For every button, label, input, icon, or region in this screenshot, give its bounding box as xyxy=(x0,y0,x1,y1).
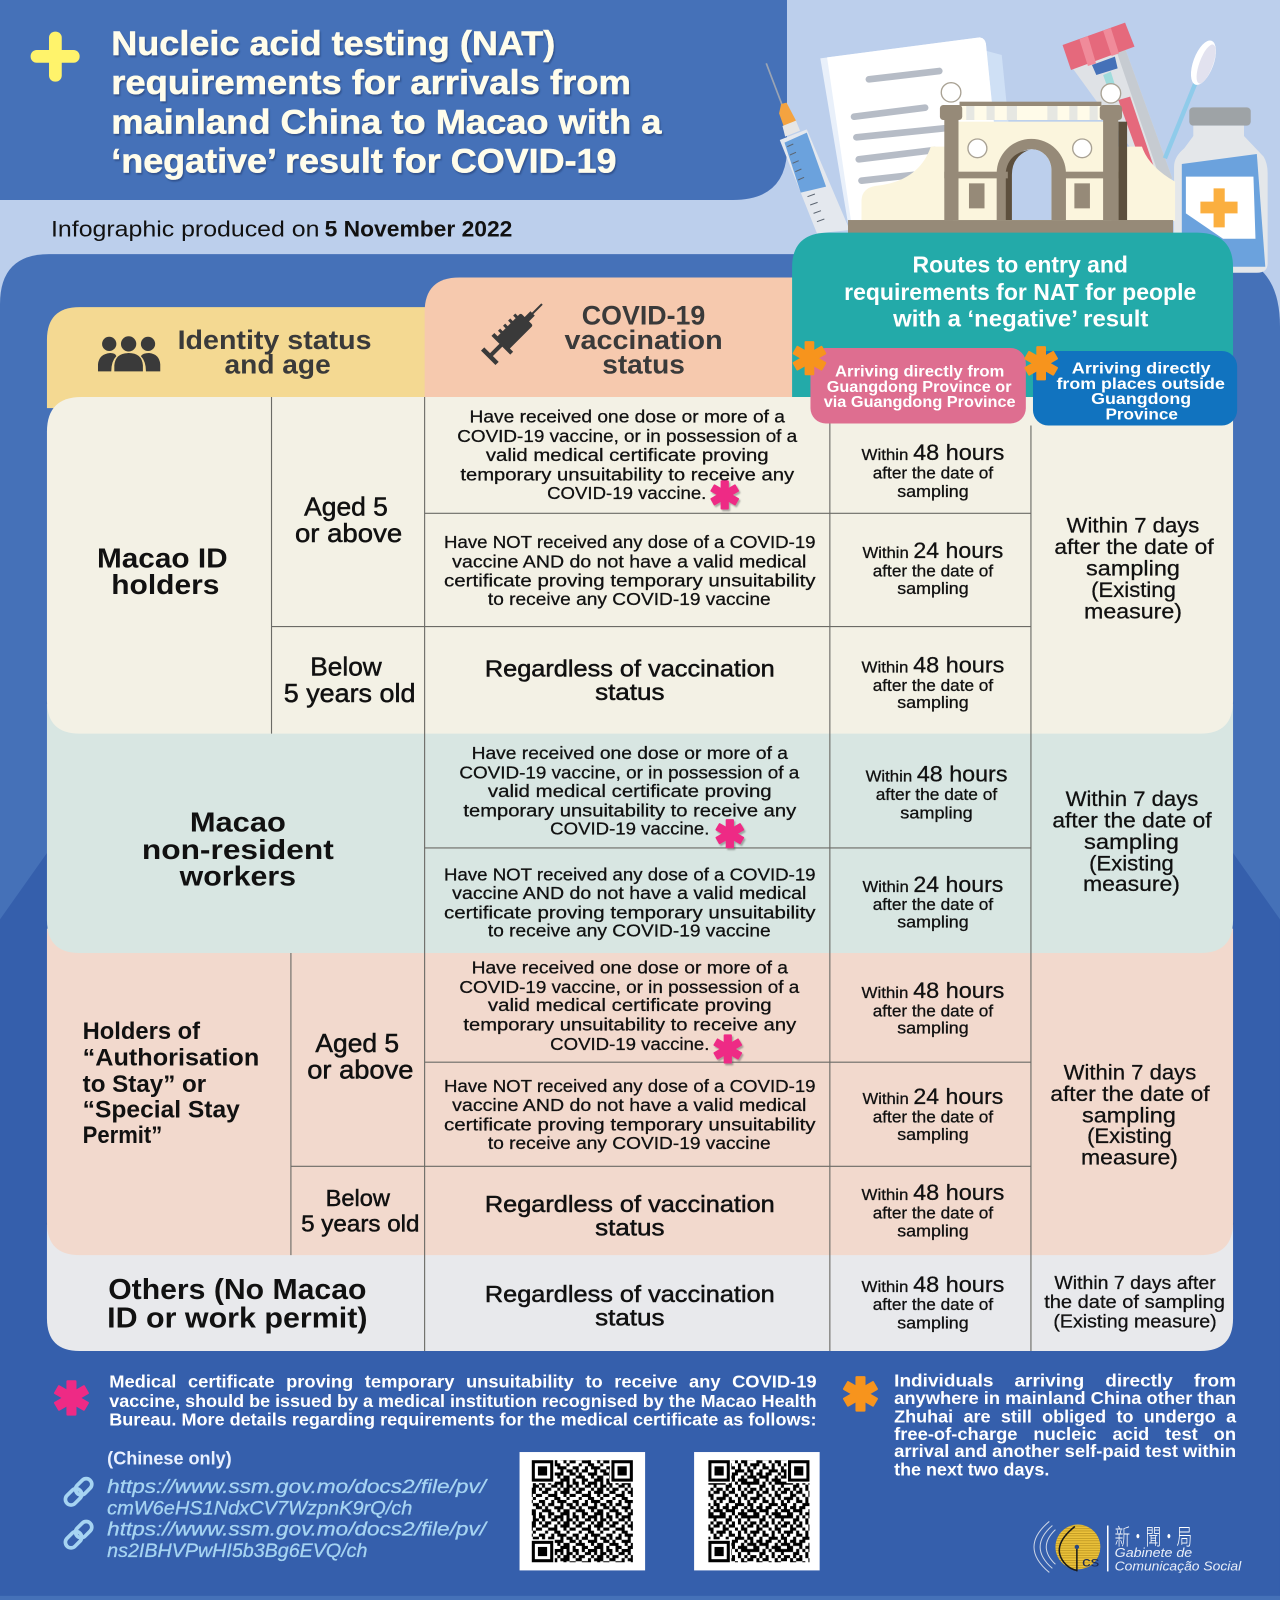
vaccination criteria xyxy=(459,957,799,1054)
title: requirements for arrivals from xyxy=(111,64,631,102)
footnote text: Medical certificate proving temporary unsuitability to receive any COVID-19 xyxy=(109,1372,817,1392)
identity label: non-resident xyxy=(142,834,334,865)
identity label: to Stay” or xyxy=(83,1071,207,1098)
footnote text: arrival and another self-paid test within xyxy=(894,1441,1236,1461)
time requirement: Within 24 hours xyxy=(863,872,1003,897)
logo: Gabinete de Comunicação Social: Gabinete de xyxy=(1115,1545,1192,1560)
footnote: arrivals from outside Zhuhai xyxy=(843,1371,1236,1480)
outside Guangdong requirement: (Existing xyxy=(1089,851,1174,875)
column header: arriving via Guangdong: Guangdong Province or xyxy=(827,379,1012,396)
title: Nucleic acid testing (NAT) xyxy=(111,25,555,63)
heading xyxy=(564,300,723,379)
time requirement: Within 48 hours xyxy=(861,440,1004,465)
heading: COVID-19 xyxy=(582,300,705,330)
vaccination criteria: Regardless of vaccination xyxy=(485,656,775,682)
links: ns2IBHVPwHI5b3Bg6EVQ/ch xyxy=(107,1540,367,1562)
age label: Below xyxy=(326,1185,390,1211)
vaccination criteria xyxy=(485,656,775,705)
vaccination criteria: temporary unsuitability to receive any xyxy=(463,1015,796,1035)
vaccination criteria: Have received one dose or more of a xyxy=(472,743,788,763)
icon: swab xyxy=(1165,37,1221,158)
vaccination criteria: status xyxy=(595,679,664,705)
outside Guangdong requirement: sampling xyxy=(1084,830,1179,854)
outside Guangdong requirement xyxy=(1044,1273,1225,1333)
vaccination criteria: COVID-19 vaccine, or in possession of a xyxy=(459,977,799,997)
vaccination criteria xyxy=(485,1191,775,1241)
links xyxy=(107,1476,489,1562)
time requirement xyxy=(861,978,1004,1038)
vaccination criteria: Have NOT received any dose of a COVID-19 xyxy=(444,532,816,552)
time requirement: Within 24 hours xyxy=(863,538,1003,563)
vaccination criteria: valid medical certificate proving xyxy=(488,995,772,1015)
time requirement xyxy=(863,538,1003,598)
icon: orange asterisk xyxy=(843,1376,878,1412)
icon: link xyxy=(63,1476,94,1507)
vaccination criteria: vaccine AND do not have a valid medical xyxy=(452,883,806,903)
vaccination criteria: to receive any COVID-19 vaccine xyxy=(488,921,771,941)
outside Guangdong requirement xyxy=(1054,514,1214,623)
vaccination criteria: valid medical certificate proving xyxy=(486,445,769,465)
age label xyxy=(284,654,415,708)
heading: requirements for NAT for people xyxy=(844,279,1196,305)
time requirement xyxy=(861,440,1004,501)
vaccination criteria: Have NOT received any dose of a COVID-19 xyxy=(444,1076,816,1096)
vaccination criteria: certificate proving temporary unsuitability xyxy=(444,902,816,922)
column header: arriving from outside Guangdong: Arriving directly xyxy=(1072,360,1211,377)
icon: test tube xyxy=(1063,23,1172,180)
vaccination criteria: Regardless of vaccination xyxy=(485,1191,775,1217)
heading xyxy=(178,325,372,379)
outside Guangdong requirement: Within 7 days xyxy=(1067,514,1199,538)
outside Guangdong requirement: measure) xyxy=(1084,599,1182,623)
time requirement: after the date of xyxy=(876,786,998,804)
icon: orange asterisk xyxy=(792,341,827,375)
title xyxy=(111,25,662,180)
age label: Aged 5 xyxy=(315,1030,399,1058)
vaccination criteria: COVID-19 vaccine. xyxy=(550,1034,709,1054)
time requirement: after the date of xyxy=(873,465,994,483)
row group: Macao ID holders xyxy=(97,406,1214,712)
icon: pink asterisk xyxy=(54,1380,89,1416)
identity label xyxy=(107,1274,367,1335)
age label: or above xyxy=(307,1057,413,1085)
production date: Infographic produced on xyxy=(51,217,319,242)
footnote: medical certificate xyxy=(54,1372,820,1570)
outside Guangdong requirement: Within 7 days xyxy=(1066,787,1198,811)
time requirement: after the date of xyxy=(873,563,994,581)
icon: yellow plus xyxy=(31,32,80,82)
time requirement: sampling xyxy=(897,483,969,501)
row: others background xyxy=(47,1224,1233,1351)
identity label: Macao xyxy=(190,807,286,838)
time requirement: Within 48 hours xyxy=(866,762,1007,787)
identity label: holders xyxy=(111,569,219,600)
outside Guangdong requirement: (Existing xyxy=(1091,578,1176,602)
vaccination criteria: status xyxy=(595,1215,664,1241)
age label: 5 years old xyxy=(301,1211,420,1237)
vaccination criteria: certificate proving temporary unsuitability xyxy=(444,571,816,591)
age label: or above xyxy=(295,520,402,548)
time requirement: after the date of xyxy=(873,1108,994,1126)
identity label: “Special Stay xyxy=(83,1096,240,1123)
time requirement: Within 24 hours xyxy=(863,1084,1003,1109)
footnote text: Zhuhai are still obliged to undergo a xyxy=(894,1406,1236,1426)
footnote text: free-of-charge nucleic acid test on xyxy=(894,1424,1236,1444)
time requirement: after the date of xyxy=(873,1002,994,1020)
vaccination criteria xyxy=(459,743,799,839)
vaccination criteria: COVID-19 vaccine, or in possession of a xyxy=(459,763,799,783)
time requirement xyxy=(861,1272,1004,1333)
icon: pink asterisk xyxy=(715,819,744,848)
footnote text: Bureau. More details regarding requirements for the medical certificate as follows: xyxy=(109,1410,817,1430)
QR code xyxy=(520,1452,645,1570)
outside Guangdong requirement: after the date of xyxy=(1050,1082,1210,1106)
illustration: medical items and Macao gate xyxy=(766,23,1268,273)
column header: arriving from outside Guangdong: Province xyxy=(1105,406,1178,423)
age label: Aged 5 xyxy=(304,493,388,521)
vaccination criteria: certificate proving temporary unsuitability xyxy=(444,1115,816,1135)
logo: Gabinete de Comunicação Social xyxy=(1034,1520,1242,1573)
time requirement: sampling xyxy=(900,804,973,822)
time requirement: sampling xyxy=(897,1223,969,1241)
identity label: Holders of xyxy=(83,1018,201,1045)
icon: pink asterisk xyxy=(710,480,739,509)
row group: others xyxy=(107,1272,1225,1335)
identity label: workers xyxy=(179,861,296,892)
time requirement xyxy=(863,1084,1003,1144)
heading: Identity status xyxy=(178,325,372,355)
time requirement xyxy=(861,652,1004,712)
icon: orange asterisk xyxy=(1024,346,1058,380)
outside Guangdong requirement: sampling xyxy=(1082,1103,1176,1127)
icon: link xyxy=(63,1519,94,1550)
heading xyxy=(844,251,1196,332)
time requirement xyxy=(863,872,1003,932)
vaccination criteria: vaccine AND do not have a valid medical xyxy=(452,551,806,571)
identity label: Macao ID xyxy=(97,542,228,573)
time requirement: Within 48 hours xyxy=(861,1180,1004,1205)
icon: medicine bottle xyxy=(1174,107,1268,273)
vaccination criteria: COVID-19 vaccine. xyxy=(547,483,706,503)
vaccination criteria xyxy=(485,1281,775,1331)
time requirement: Within 48 hours xyxy=(861,1272,1004,1297)
identity label: Permit” xyxy=(83,1122,162,1149)
bottom strip xyxy=(0,1596,1280,1600)
title: mainland China to Macao with a xyxy=(111,104,662,142)
title: ‘negative’ result for COVID-19 xyxy=(111,142,617,180)
column header: arriving from outside Guangdong xyxy=(1033,351,1237,426)
identity label: ID or work permit) xyxy=(107,1303,367,1335)
outside Guangdong requirement xyxy=(1052,787,1212,896)
footnote text: vaccine, should be issued by a medical institution recognised by the Macao Health xyxy=(109,1391,817,1411)
row group: Macao non-resident workers xyxy=(142,743,1212,941)
identity label: “Authorisation xyxy=(83,1044,259,1071)
time requirement: sampling xyxy=(897,1126,969,1144)
column header: arriving via Guangdong: via Guangdong Province xyxy=(824,394,1016,411)
vaccination criteria: temporary unsuitability to receive any xyxy=(460,465,794,485)
time requirement: after the date of xyxy=(873,1296,994,1314)
vaccination criteria: vaccine AND do not have a valid medical xyxy=(452,1095,806,1115)
time requirement: sampling xyxy=(897,694,969,712)
table header: routes to entry xyxy=(792,233,1233,403)
time requirement xyxy=(861,1180,1004,1241)
time requirement: sampling xyxy=(897,580,969,598)
production date: 5 November 2022 xyxy=(325,217,512,242)
outside Guangdong requirement: after the date of xyxy=(1052,809,1212,833)
footnote text xyxy=(109,1372,817,1430)
row group: Authorisation to Stay or Special Stay Permit holders xyxy=(83,957,1210,1241)
time requirement: after the date of xyxy=(873,1204,994,1222)
column header: arriving via Guangdong: Arriving directly from xyxy=(835,364,1004,381)
identity label xyxy=(97,542,228,600)
age label xyxy=(307,1030,413,1085)
outside Guangdong requirement: (Existing xyxy=(1087,1124,1172,1148)
icon: syringe xyxy=(479,295,551,367)
table header: vaccination status xyxy=(425,278,806,408)
row: Macao ID holders background xyxy=(47,397,1233,734)
icon: syringe xyxy=(766,63,850,233)
vaccination criteria xyxy=(457,406,797,503)
time requirement: Within 48 hours xyxy=(861,652,1004,677)
outside Guangdong requirement xyxy=(1050,1061,1210,1169)
column header: arriving via Guangdong xyxy=(810,348,1026,423)
identity label: Others (No Macao xyxy=(108,1274,366,1306)
note: language: (Chinese only) xyxy=(107,1447,232,1468)
time requirement xyxy=(866,762,1007,822)
time requirement: after the date of xyxy=(873,677,994,695)
vaccination criteria: Have received one dose or more of a xyxy=(470,406,785,426)
vaccination criteria: Have received one dose or more of a xyxy=(472,957,788,977)
outside Guangdong requirement: Within 7 days after xyxy=(1054,1273,1216,1294)
heading: and age xyxy=(225,349,331,379)
vaccination criteria xyxy=(444,865,816,941)
table grid lines xyxy=(272,397,1031,1351)
time requirement: sampling xyxy=(897,1020,969,1038)
vaccination criteria xyxy=(444,1076,816,1153)
age label xyxy=(301,1185,420,1237)
outside Guangdong requirement: measure) xyxy=(1081,1145,1178,1169)
time requirement: sampling xyxy=(897,914,969,932)
time requirement: after the date of xyxy=(873,896,994,914)
links: https://www.ssm.gov.mo/docs2/file/pv/ xyxy=(107,1476,489,1498)
column header: arriving from outside Guangdong: Guangdong xyxy=(1091,391,1191,408)
production date xyxy=(51,217,512,242)
vaccination criteria: to receive any COVID-19 vaccine xyxy=(488,1133,771,1153)
links: https://www.ssm.gov.mo/docs2/file/pv/ xyxy=(107,1519,489,1541)
QR code xyxy=(694,1452,820,1570)
footnote text xyxy=(894,1371,1236,1480)
row: permit holders background xyxy=(47,929,1233,1255)
table header: identity status and age xyxy=(47,307,429,408)
age label: 5 years old xyxy=(284,680,415,708)
heading: with a ‘negative’ result xyxy=(892,306,1149,332)
logo: Gabinete de Comunicação Social: cs xyxy=(1082,1554,1099,1570)
icon: Macao gate xyxy=(848,83,1175,233)
vaccination criteria: valid medical certificate proving xyxy=(488,781,772,801)
heading: vaccination xyxy=(564,325,723,355)
footnote text: anywhere in mainland China other than xyxy=(894,1388,1236,1408)
age label xyxy=(295,493,402,548)
vaccination criteria xyxy=(444,532,816,609)
icon: pink asterisk xyxy=(713,1034,742,1064)
icon: documents xyxy=(820,37,1019,223)
heading: Routes to entry and xyxy=(913,251,1128,277)
identity label xyxy=(83,1018,259,1149)
logo: Gabinete de Comunicação Social: 新·聞·局 xyxy=(1115,1520,1192,1552)
vaccination criteria: COVID-19 vaccine, or in possession of a xyxy=(457,426,797,446)
icon: people xyxy=(98,336,160,371)
logo: Gabinete de Comunicação Social: Comunicação Social xyxy=(1115,1558,1242,1573)
vaccination criteria: temporary unsuitability to receive any xyxy=(463,800,796,820)
outside Guangdong requirement: measure) xyxy=(1083,872,1180,896)
outside Guangdong requirement: the date of sampling xyxy=(1044,1292,1225,1313)
heading: status xyxy=(602,349,685,379)
vaccination criteria: Regardless of vaccination xyxy=(485,1281,775,1307)
row: non-resident workers background xyxy=(47,704,1233,953)
time requirement: Within 48 hours xyxy=(861,978,1004,1003)
identity label xyxy=(142,807,334,892)
outside Guangdong requirement: (Existing measure) xyxy=(1053,1312,1217,1333)
outside Guangdong requirement: after the date of xyxy=(1054,535,1214,559)
footnote text: Individuals arriving directly from xyxy=(894,1371,1236,1391)
footnote text: the next two days. xyxy=(894,1460,1049,1480)
outside Guangdong requirement: Within 7 days xyxy=(1064,1061,1196,1085)
links: cmW6eHS1NdxCV7WzpnK9rQ/ch xyxy=(107,1497,412,1519)
column header: arriving from outside Guangdong: from places outside xyxy=(1056,376,1225,393)
outside Guangdong requirement: sampling xyxy=(1086,557,1180,581)
title banner xyxy=(0,0,787,200)
vaccination criteria: Have NOT received any dose of a COVID-19 xyxy=(444,865,816,885)
time requirement: sampling xyxy=(897,1315,969,1333)
vaccination criteria: COVID-19 vaccine. xyxy=(550,819,709,839)
vaccination criteria: to receive any COVID-19 vaccine xyxy=(488,589,771,609)
age label: Below xyxy=(310,654,382,682)
vaccination criteria: status xyxy=(595,1305,664,1331)
